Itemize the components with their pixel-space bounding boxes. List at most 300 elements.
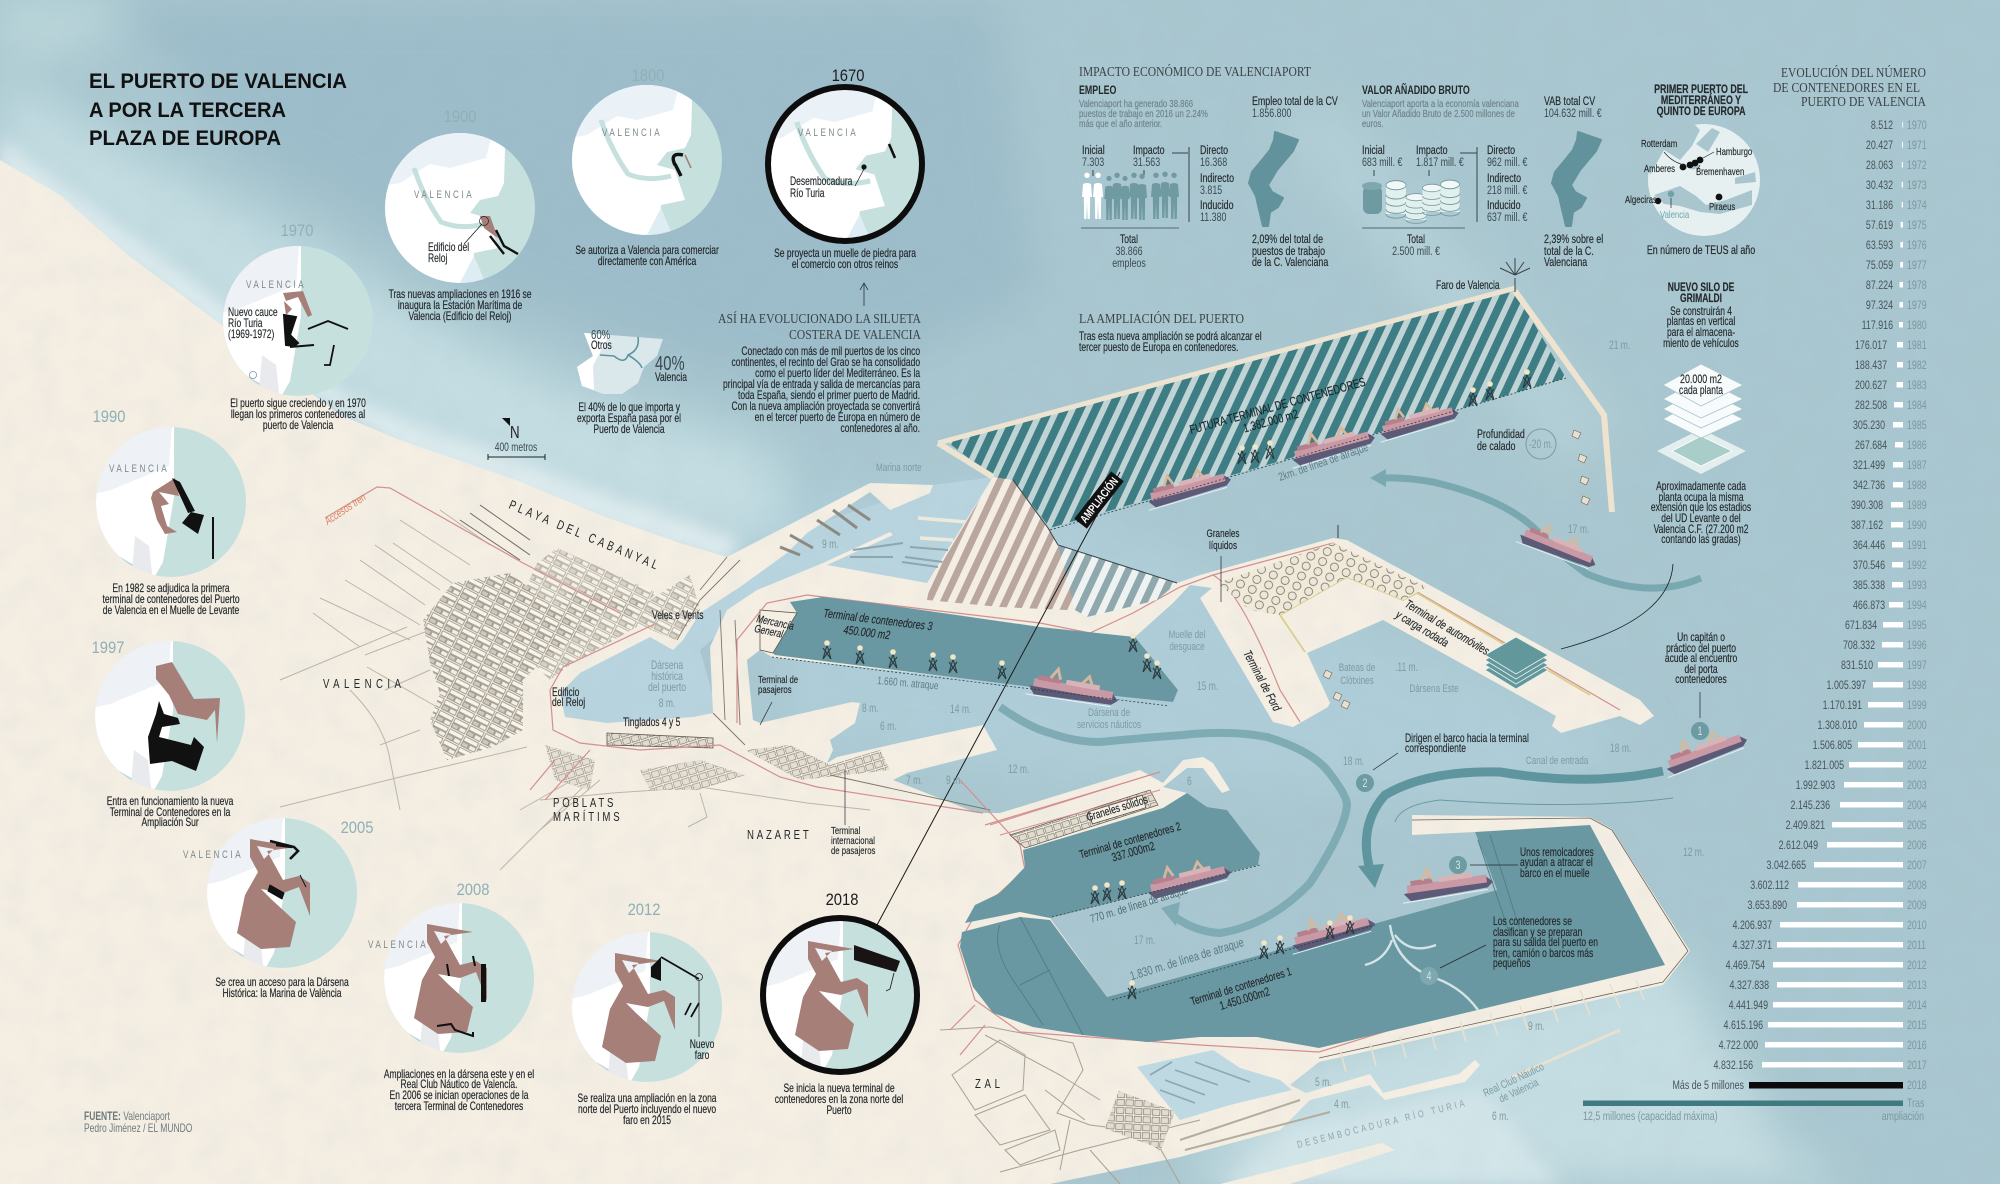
text: intro: como el puerto líder del Mediterráneo. Es la: [755, 368, 920, 380]
map label: Terminal 3: 450.000 m2: [843, 623, 891, 643]
panel: silo Grimaldi: contando las gradas): [1661, 534, 1741, 546]
map label: Darsena historica: 8 m.: [659, 698, 675, 710]
panel: silo Grimaldi: del UD Levante o del: [1661, 513, 1741, 525]
bar chart: containers per year: 87.224: [1866, 279, 1893, 292]
caption: Spain share: El 40% de lo que importa y: [578, 402, 681, 414]
bar chart: containers per year: 2004: [1907, 799, 1927, 812]
panel: empleo total CV: Empleo total de la CV: [1252, 95, 1338, 108]
panel: valor anadido bruto: 637 mill. €: [1487, 211, 1528, 224]
bar chart: containers per year: 2010: [1907, 919, 1927, 932]
bar chart: containers per year: 4.832.156: [1714, 1059, 1753, 1072]
bar chart: containers per year: 3.653.890: [1748, 899, 1787, 912]
route arrow: ship approach: [1358, 771, 1663, 888]
map label: Futura terminal: FUTURA TERMINAL DE CONTENEDORES: [1188, 376, 1367, 437]
step 2: 2: [1363, 777, 1368, 790]
map label: Playa del Cabanyal: PLAYA DEL CABANYAL: [507, 499, 663, 574]
circle 1900: 1900: [444, 108, 477, 126]
bar chart: containers per year: 4.327.371: [1733, 939, 1772, 952]
source: Pedro Jiménez / EL MUNDO: [84, 1123, 192, 1135]
circle 1990: VALENCIA: [109, 463, 169, 475]
north arrow and scale: 400 metros: [495, 442, 537, 454]
north-west wall corner: [938, 443, 993, 477]
depths: 6 m.: [880, 721, 897, 733]
caption 2005: Se crea un acceso para la Dársena: [215, 977, 349, 989]
panel: empleo: Impacto: [1133, 144, 1165, 157]
panel: valor anadido bruto: 962 mill. €: [1487, 156, 1528, 169]
bar chart: containers per year: Tras: [1907, 1097, 1924, 1110]
caption 1990: [103, 583, 240, 617]
map label: Veles e Vents: Veles e Vents: [652, 610, 704, 622]
depths: 6 m.: [1492, 1111, 1509, 1123]
circle 1990: [94, 410, 246, 577]
circle 2012: [572, 904, 722, 1082]
caption 2012: Se realiza una ampliación en la zona: [578, 1093, 717, 1105]
map: Comunitat Valenciana: [1249, 132, 1298, 226]
depths: 18 m.: [1610, 743, 1631, 755]
bar chart: containers per year: 1998: [1907, 679, 1927, 692]
bar chart: containers per year: 2.612.049: [1779, 839, 1818, 852]
caption 2018: Se inicia la nueva terminal de: [784, 1083, 895, 1095]
water labels: Clòtxines: [1340, 675, 1374, 687]
step 4: clasifican y se preparan: [1493, 927, 1582, 939]
bar chart: containers per year: 1.821.005: [1805, 759, 1844, 772]
map: Europe: [1648, 122, 1760, 236]
panel: empleo: 7.303: [1082, 156, 1104, 169]
north arrow and scale: [488, 418, 545, 460]
circle 2018: [760, 894, 920, 1075]
map label: Profundidad de calado: [1477, 428, 1525, 453]
future container terminal hatched area: [945, 291, 1566, 528]
step 1: 1: [1698, 725, 1703, 738]
panel: empleo: 16.368: [1200, 156, 1227, 169]
panel: silo Grimaldi: 20.000 m2: [1680, 373, 1722, 386]
panel: empleo: Indirecto: [1200, 172, 1234, 185]
caption 1900: inaugura la Estación Marítima de: [398, 300, 523, 312]
bar chart: containers per year: [1583, 119, 1927, 1123]
bar chart: containers per year: 2013: [1907, 979, 1927, 992]
marina sur water: [1137, 1050, 1292, 1120]
bar chart: containers per year: 2012: [1907, 959, 1927, 972]
bar chart: containers per year: 1.992.903: [1796, 779, 1835, 792]
map label: Edificio del Reloj: Edificio: [552, 687, 580, 699]
caption 2005: Histórica: la Marina de València: [223, 988, 342, 1000]
map label: Darsena historica: Dársena: [651, 660, 683, 672]
bar chart: containers per year: 2011: [1907, 939, 1926, 952]
bar chart: containers per year: 4.615.196: [1724, 1019, 1763, 1032]
panel: valor anadido bruto: Valenciaport aporta a la economía valenciana: [1362, 98, 1520, 109]
caption 1670: [774, 248, 916, 271]
text: intro: contenedores al año.: [841, 423, 920, 435]
step 1: acude al encuentro: [1665, 653, 1738, 665]
south marina piers: [1340, 980, 1644, 1078]
bar chart: containers per year: 117.916: [1862, 319, 1893, 332]
panel: primer puerto: Bremenhaven: [1696, 166, 1744, 177]
bar chart: containers per year: 1980: [1907, 319, 1927, 332]
text: intro: principal vía de entrada y salida de mercancías para: [723, 379, 920, 391]
panel: silo Grimaldi: [1651, 282, 1751, 546]
terminal 2 block: [965, 793, 1260, 923]
circle 2012: faro: [695, 1050, 710, 1062]
circle 1670: Río Turia: [790, 188, 825, 200]
panel: valor anadido bruto: 2.500 mill. €: [1392, 245, 1440, 258]
car terminal yellow outline: [1280, 577, 1590, 695]
bar chart: containers per year: 1986: [1907, 439, 1927, 452]
water labels: Dársena de: [1088, 707, 1130, 719]
panel: silo Grimaldi: cada planta: [1679, 385, 1723, 397]
map label: Tinglados: Tinglados 4 y 5: [623, 717, 681, 729]
liquid bulk tanks: [1217, 543, 1427, 615]
map label: Terminal de automoviles: Terminal de automóviles: [1402, 597, 1492, 659]
water labels: Muelle del: [1168, 629, 1206, 641]
circle 1970: VALENCIA: [246, 279, 306, 291]
circle 2018: 2018: [826, 891, 859, 909]
bar chart: containers per year: 4.722.000: [1719, 1039, 1758, 1052]
step 4: para su salida del puerto en: [1493, 937, 1598, 949]
circle 1800: 1800: [632, 67, 665, 85]
panel: empleo: [1079, 84, 1234, 270]
marina and darsena lighter water: [540, 477, 993, 730]
bar chart: containers per year: 1990: [1907, 519, 1927, 532]
breakwater edge: [1319, 818, 1688, 1058]
bar chart: containers per year: 57.619: [1866, 219, 1893, 232]
title: EL PUERTO DE VALENCIA: [89, 70, 347, 93]
panel: valor anadido bruto: 683 mill. €: [1362, 156, 1403, 169]
circle 1900: Reloj: [428, 253, 447, 265]
circle 1900: [385, 110, 535, 283]
map label: Profundidad de calado: Profundidad: [1477, 428, 1525, 441]
caption 1970: El puerto sigue creciendo y en 1970: [230, 398, 366, 410]
step 1: Un capitán o: [1677, 632, 1725, 644]
bar chart: containers per year: 1973: [1907, 179, 1927, 192]
bar chart: containers per year: 1978: [1907, 279, 1927, 292]
caption 2018: Puerto: [827, 1105, 852, 1117]
circle 1990: 1990: [93, 408, 126, 426]
bar chart: containers per year: 1981: [1907, 339, 1927, 352]
heading: asi ha evolucionado: COSTERA DE VALENCIA: [789, 328, 922, 343]
map: Comunitat Valenciana VAB: [1552, 132, 1601, 226]
step 1: [1665, 632, 1738, 740]
bar chart: containers per year: 1988: [1907, 479, 1927, 492]
bar chart: containers per year: 1993: [1907, 579, 1927, 592]
bar chart: containers per year: 1.005.397: [1827, 679, 1866, 692]
thin pointer to silo: [1561, 564, 1673, 649]
bar chart: containers per year: 2003: [1907, 779, 1927, 792]
title: A POR LA TERCERA: [89, 99, 286, 122]
bar chart: containers per year: 63.593: [1866, 239, 1893, 252]
port buildings west: [745, 745, 890, 780]
panel: empleo total CV: 1.856.800: [1252, 107, 1292, 120]
bar chart: containers per year: 188.437: [1855, 359, 1887, 372]
panel: primer puerto: Algeciras: [1625, 194, 1657, 205]
circle 1970: Nuevo cauce: [228, 307, 278, 319]
caption: Spain share: [577, 402, 681, 436]
panel: valor anadido bruto: Impacto: [1416, 144, 1448, 157]
depths: [822, 340, 1704, 1123]
step 3: barco en el muelle: [1520, 868, 1590, 880]
water labels: Canal de entrada: [1526, 755, 1589, 767]
panel: primer puerto: En número de TEUS al año: [1647, 244, 1755, 257]
bar chart: containers per year: 2018: [1907, 1079, 1927, 1092]
bar chart: containers per year: ampliación: [1882, 1110, 1924, 1123]
caption: Spain share: Puerto de Valencia: [593, 424, 665, 436]
depths: 18 m.: [1343, 756, 1364, 768]
panel: valor anadido bruto: Inicial: [1362, 144, 1385, 157]
water labels: [876, 462, 1589, 767]
rail lines: [325, 487, 1620, 1055]
panel: empleo: Directo: [1200, 144, 1228, 157]
silo block on dock: [1485, 637, 1548, 689]
panel: VAB total CV: 104.632 mill. €: [1544, 107, 1602, 120]
map label: Terminal internacional: internacional: [831, 835, 875, 846]
north breakwater: [1515, 291, 1612, 512]
map: Spain share: [577, 329, 687, 394]
depths: 15 m.: [1197, 681, 1218, 693]
bar chart: containers per year: 28.063: [1866, 159, 1893, 172]
step 4: Los contenedores se: [1493, 916, 1572, 928]
south sand spit: [1220, 1143, 1395, 1184]
panel: valor anadido bruto: 1.817 mill. €: [1416, 156, 1464, 169]
water labels: Bateas de: [1339, 662, 1375, 674]
map label: Terminal de pasajeros: pasajeros: [758, 684, 792, 695]
depths: 17 m.: [1134, 935, 1155, 947]
map label: Terminal 3: [821, 607, 933, 648]
step 3: Unos remolcadores: [1520, 847, 1594, 859]
panel: valor anadido bruto: VALOR AÑADIDO BRUTO: [1362, 83, 1470, 97]
panel: silo Grimaldi: Valencia C.F. (27.200 m2: [1654, 524, 1749, 536]
caption 1670: el comercio con otros reinos: [792, 259, 898, 271]
bar chart: containers per year: 1977: [1907, 259, 1927, 272]
map label: Terminal de Ford: Terminal de Ford: [1240, 648, 1284, 714]
caption 1997: Ampliación Sur: [141, 817, 199, 829]
depths: 21 m.: [1609, 340, 1630, 352]
future zone: pink hatched fill area: [927, 477, 1120, 610]
panel: valor anadido bruto: [1362, 83, 1528, 258]
icon: people: [1082, 172, 1179, 220]
map label: Poblats Maritims: POBLATS: [553, 797, 616, 810]
bar chart: containers per year: 2007: [1907, 859, 1927, 872]
icon: coins: [1362, 180, 1460, 223]
bar chart: containers per year: 1972: [1907, 159, 1927, 172]
map label: Darsena historica: del puerto: [648, 682, 686, 694]
bar chart: containers per year: 2002: [1907, 759, 1927, 772]
map label: Poblats Maritims: MARÍTIMS: [553, 810, 622, 824]
bar chart: containers per year: 2015: [1907, 1019, 1927, 1032]
map label: Graneles liquidos: líquidos: [1209, 540, 1237, 552]
coast shallows: [0, 138, 740, 565]
depths: 6: [1187, 776, 1192, 788]
bar chart: containers per year: 176.017: [1855, 339, 1887, 352]
bar chart: containers per year: 385.338: [1853, 579, 1885, 592]
bar chart: containers per year: 1984: [1907, 399, 1927, 412]
source: [84, 1111, 192, 1135]
bar chart: containers per year: 1979: [1907, 299, 1927, 312]
heading: asi ha evolucionado: [718, 310, 922, 343]
breakwater blocks: [1323, 430, 1590, 709]
depths: 4 m.: [1334, 1099, 1351, 1111]
map label: 770 m: 770 m. de línea de atraque: [1089, 884, 1190, 926]
panel: empleo total CV: de la C. Valenciana: [1252, 256, 1328, 269]
map label: Profundidad de calado: de calado: [1477, 440, 1516, 453]
source: FUENTE: Valenciaport: [84, 1111, 170, 1123]
panel: silo Grimaldi: extensión que los estadios: [1651, 502, 1751, 514]
north arrow and scale: N: [510, 423, 520, 443]
bar chart: containers per year: 2017: [1907, 1059, 1927, 1072]
bar chart: containers per year: 2014: [1907, 999, 1927, 1012]
step 2: [1356, 733, 1529, 792]
mercancia general block: [760, 610, 797, 653]
circle 2008: 2008: [457, 881, 490, 899]
bar chart: containers per year: 2006: [1907, 839, 1927, 852]
bar chart: containers per year: 1995: [1907, 619, 1927, 632]
caption 1800: directamente con América: [598, 256, 697, 268]
heading: ampliacion del puerto: tercer puesto de Europa en contenedores.: [1079, 342, 1238, 354]
map label: Mercancia General: Mercancía: [755, 613, 796, 633]
map label: Edificio del Reloj: del Reloj: [552, 697, 585, 709]
map label: Desembocadura: DESEMBOCADURA RÍO TURIA: [1296, 1097, 1468, 1150]
bar chart: containers per year: 97.324: [1866, 299, 1893, 312]
panel: silo Grimaldi: para el almacena-: [1667, 327, 1735, 339]
panel: empleo: 31.563: [1133, 156, 1160, 169]
map: Spain share: 60%: [591, 329, 610, 342]
circle 1800: VALENCIA: [602, 127, 662, 139]
panel: valor anadido bruto: Indirecto: [1487, 172, 1521, 185]
panel: primer puerto: Piraeus: [1709, 201, 1736, 212]
text: intro: Con la nueva ampliación proyectada se convertirá: [731, 401, 920, 413]
map label: 1830 m: 1.830 m. de línea de atraque: [1129, 936, 1245, 984]
heading: asi ha evolucionado: ASÍ HA EVOLUCIONADO LA SILUETA: [718, 310, 922, 327]
water labels: Marina norte: [876, 462, 922, 474]
circle 1800: [572, 70, 722, 235]
map: Spain share: Valencia: [655, 372, 687, 384]
caption 1800: [575, 245, 719, 268]
map label: Poblats Maritims: [553, 797, 622, 824]
water labels: desguace: [1169, 641, 1205, 653]
step 4: pequeños: [1493, 958, 1530, 970]
bar chart: containers per year: 2.145.236: [1791, 799, 1830, 812]
caption 2005: [215, 977, 349, 1000]
bar chart: containers per year: 2.409.821: [1786, 819, 1825, 832]
text: intro: toda España, siendo el primer puerto de Madrid.: [738, 390, 920, 402]
circle 1670: 1670: [832, 67, 865, 85]
panel: valor anadido bruto: Inducido: [1487, 199, 1521, 212]
circle 2008: [368, 884, 534, 1053]
step 1: práctico del puerto: [1666, 643, 1736, 655]
caption 2012: [578, 1093, 717, 1127]
caption 1970: puerto de Valencia: [263, 420, 334, 432]
panel: valor anadido bruto: Directo: [1487, 144, 1515, 157]
heading: ampliacion del puerto: Tras esta nueva ampliación se podrá alcanzar el: [1079, 331, 1262, 343]
bar chart: containers per year: 1987: [1907, 459, 1927, 472]
bar chart: containers per year: 2008: [1907, 879, 1927, 892]
north seawall: [938, 288, 1515, 443]
graneles solidos buildings: [1010, 790, 1158, 848]
circle 1970: Río Turia: [228, 318, 263, 330]
bar chart: containers per year: 708.332: [1843, 639, 1875, 652]
step 2: Dirigen el barco hacia la terminal: [1405, 733, 1529, 745]
bar chart: containers per year: 1.308.010: [1818, 719, 1857, 732]
map label: Nazaret: NAZARET: [747, 829, 812, 842]
bar chart: containers per year: 4.441.949: [1729, 999, 1768, 1012]
land: sand, quays and east dock: [0, 160, 1690, 1184]
circle 2005: 2005: [341, 819, 374, 837]
panel: VAB total CV: Valenciana: [1544, 256, 1587, 269]
bar chart: containers per year: 75.059: [1866, 259, 1893, 272]
step 4: tren, camión o barcos más: [1493, 948, 1593, 960]
map label: Graneles liquidos: [1207, 528, 1240, 552]
depths: 9 m.: [946, 775, 963, 787]
depths: 14 m.: [950, 704, 971, 716]
panel: empleo: 38.866: [1115, 245, 1143, 258]
panel: empleo: empleos: [1112, 257, 1146, 270]
bar chart: containers per year: 1971: [1907, 139, 1927, 152]
Tinglados sheds: [607, 733, 713, 748]
bar chart: containers per year: 466.873: [1853, 599, 1885, 612]
bar chart: containers per year: 1985: [1907, 419, 1927, 432]
panel: empleo: EMPLEO: [1079, 84, 1116, 97]
bar chart: containers per year: 364.446: [1853, 539, 1885, 552]
bar chart: containers per year: 390.308: [1851, 499, 1883, 512]
bar chart: containers per year: 2009: [1907, 899, 1927, 912]
panel: silo Grimaldi: plantas en vertical: [1667, 316, 1735, 328]
caption 1900: Tras nuevas ampliaciones en 1916 se: [389, 289, 532, 301]
bar chart: containers per year: 1975: [1907, 219, 1927, 232]
badge: ampliacion: AMPLIACIÓN: [1077, 474, 1121, 526]
bar chart: containers per year: 4.469.754: [1726, 959, 1765, 972]
bar chart: containers per year: 387.162: [1851, 519, 1883, 532]
ZAL road sketch: [940, 1027, 1330, 1184]
map label: Terminal 3: Terminal de contenedores 3: [823, 607, 933, 634]
title: [89, 70, 347, 150]
bar chart: containers per year: 8.512: [1871, 119, 1893, 132]
circle 1900: VALENCIA: [414, 189, 474, 201]
depth marker: -20 m.: [1529, 439, 1553, 451]
map label: Graneles liquidos: Graneles: [1207, 528, 1240, 540]
panel: empleo: Total: [1120, 234, 1138, 246]
bar chart: containers per year: 12,5 millones (capacidad máxima): [1583, 1110, 1718, 1123]
map label: Terminal de automoviles: y carga rodada: [1392, 608, 1451, 650]
water labels: servicios náuticos: [1077, 719, 1141, 731]
bar chart: containers per year: 200.627: [1855, 379, 1887, 392]
bar chart: containers per year: 305.230: [1853, 419, 1885, 432]
map label: Terminal de pasajeros: [758, 674, 798, 695]
caption 2008: [384, 1069, 534, 1113]
caption 2012: norte del Puerto incluyendo el nuevo: [578, 1104, 716, 1116]
city blocks: [423, 573, 583, 760]
depths: 7 m.: [906, 775, 923, 787]
map label: Mercancia General: [753, 613, 796, 643]
circle 2012: 2012: [628, 901, 661, 919]
quay dotted lines: [772, 378, 1566, 1000]
text: intro: Conectado con más de mil puertos de los cinco: [741, 346, 920, 358]
depths: 17 m.: [1568, 524, 1589, 536]
caption 1970: llegan los primeros contenedores al: [231, 409, 365, 421]
map label: Terminal 1: Terminal de contenedores 1: [1189, 966, 1294, 1009]
bar chart: containers per year: 1989: [1907, 499, 1927, 512]
bar chart: containers per year: 1992: [1907, 559, 1927, 572]
icon: silo diamonds and stadium: [1657, 364, 1746, 474]
city street sketch: [280, 505, 870, 870]
caption 1997: [107, 796, 234, 829]
panel: empleo: Inicial: [1082, 144, 1105, 157]
circle 1670: [765, 70, 925, 244]
map label: Faro de Valencia: Faro de Valencia: [1436, 280, 1500, 292]
map label: Real Club Nautico: de Valencia: [1497, 1077, 1541, 1106]
bar chart: containers per year: 1991: [1907, 539, 1927, 552]
panel: primer puerto: Hamburgo: [1716, 146, 1752, 157]
map label: Terminal internacional: Terminal: [831, 825, 860, 836]
cranes: [823, 369, 1531, 999]
panel: VAB total CV: [1544, 95, 1603, 269]
